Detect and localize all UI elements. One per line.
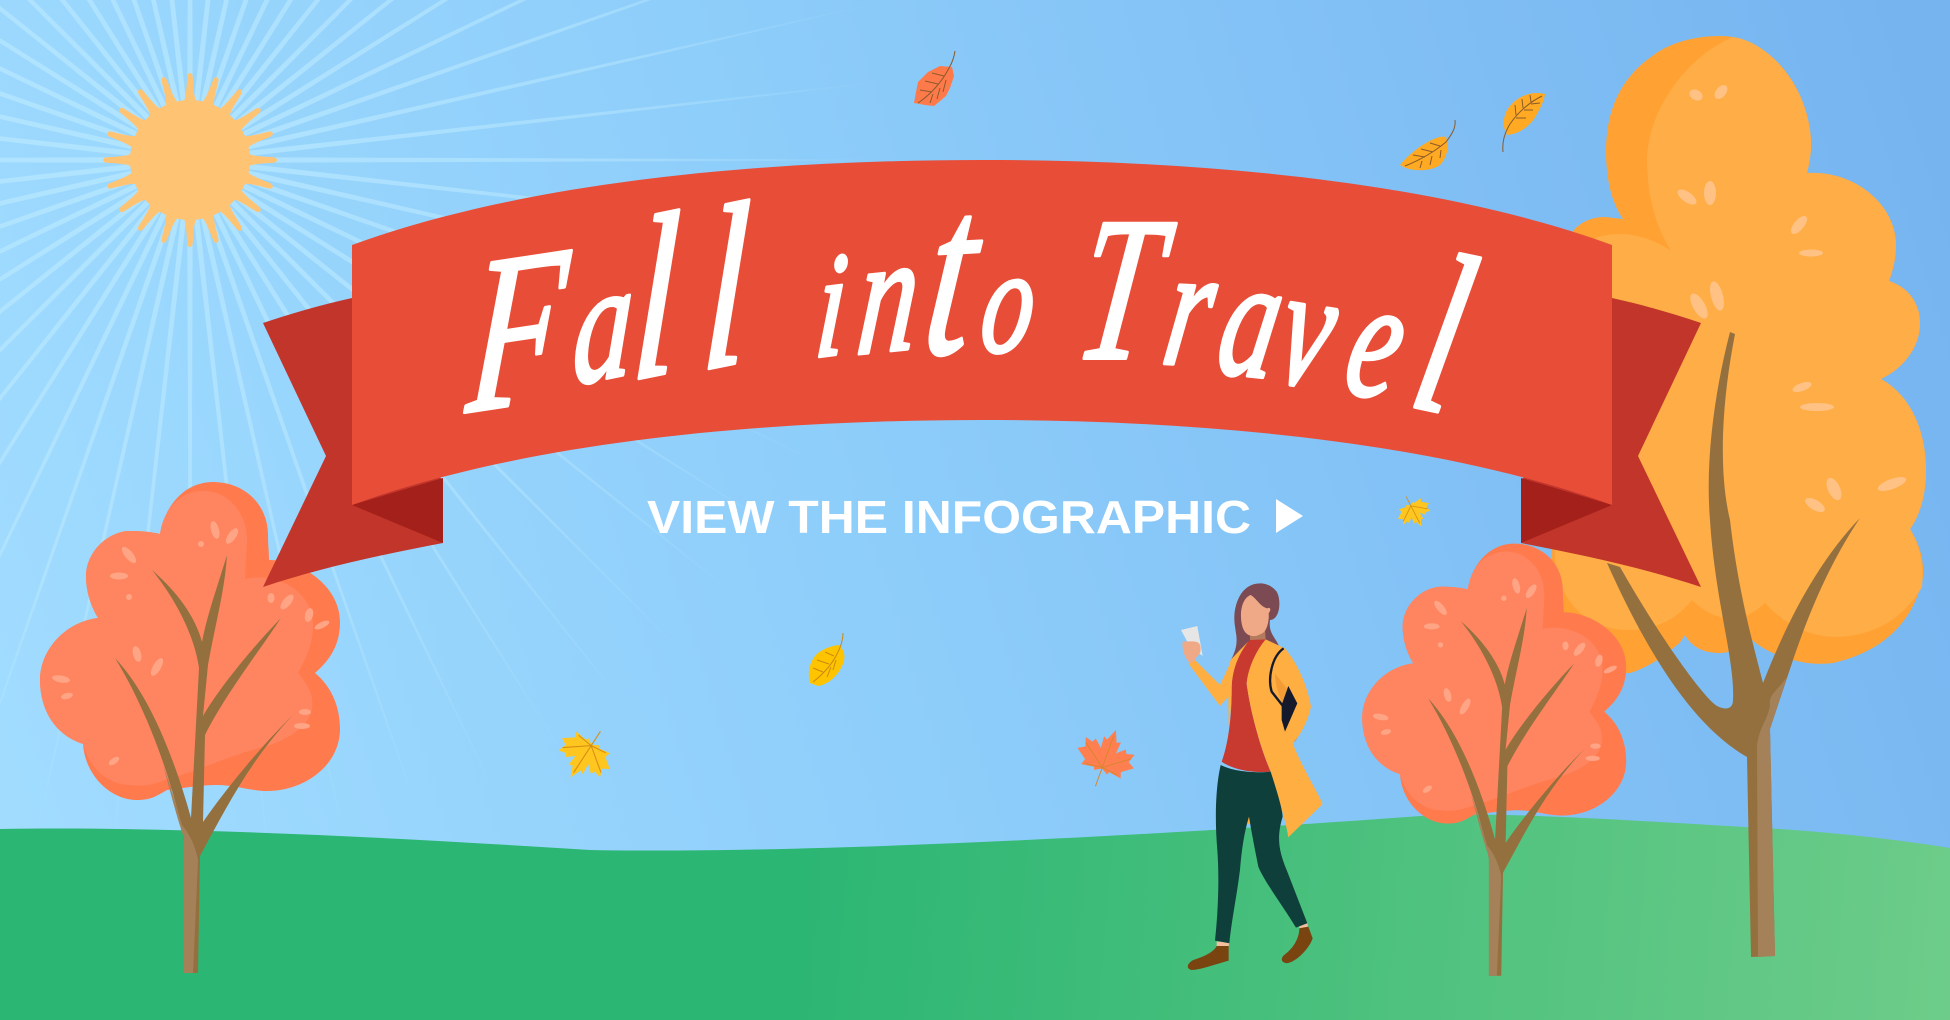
tree: small coral left (40, 482, 340, 973)
ribbon left tail (263, 298, 443, 587)
leaf: coral top (914, 51, 955, 106)
leaf: yellow maple (547, 716, 624, 793)
ribbon left fold (352, 478, 443, 543)
sun rays (0, 0, 890, 860)
tree: small coral right (1362, 544, 1626, 976)
ribbon right tail (1521, 298, 1701, 587)
ribbon right fold (1521, 478, 1612, 543)
leaf: yellow (809, 633, 844, 686)
ground (0, 815, 1950, 1020)
title: Fall into Travel (442, 138, 1505, 462)
tree: large orange (1552, 36, 1926, 957)
arrow (1276, 499, 1303, 533)
person (1181, 583, 1323, 970)
ribbon main band (352, 160, 1612, 505)
leaf: orange upper (1503, 93, 1545, 152)
sun (103, 73, 277, 247)
leaf: coral maple (1067, 720, 1144, 797)
ribbon banner (263, 160, 1701, 587)
call to action: VIEW THE INFOGRAPHIC (647, 491, 1251, 543)
leaf: orange (1400, 120, 1455, 170)
leaf: small yellow maple (1391, 489, 1437, 534)
